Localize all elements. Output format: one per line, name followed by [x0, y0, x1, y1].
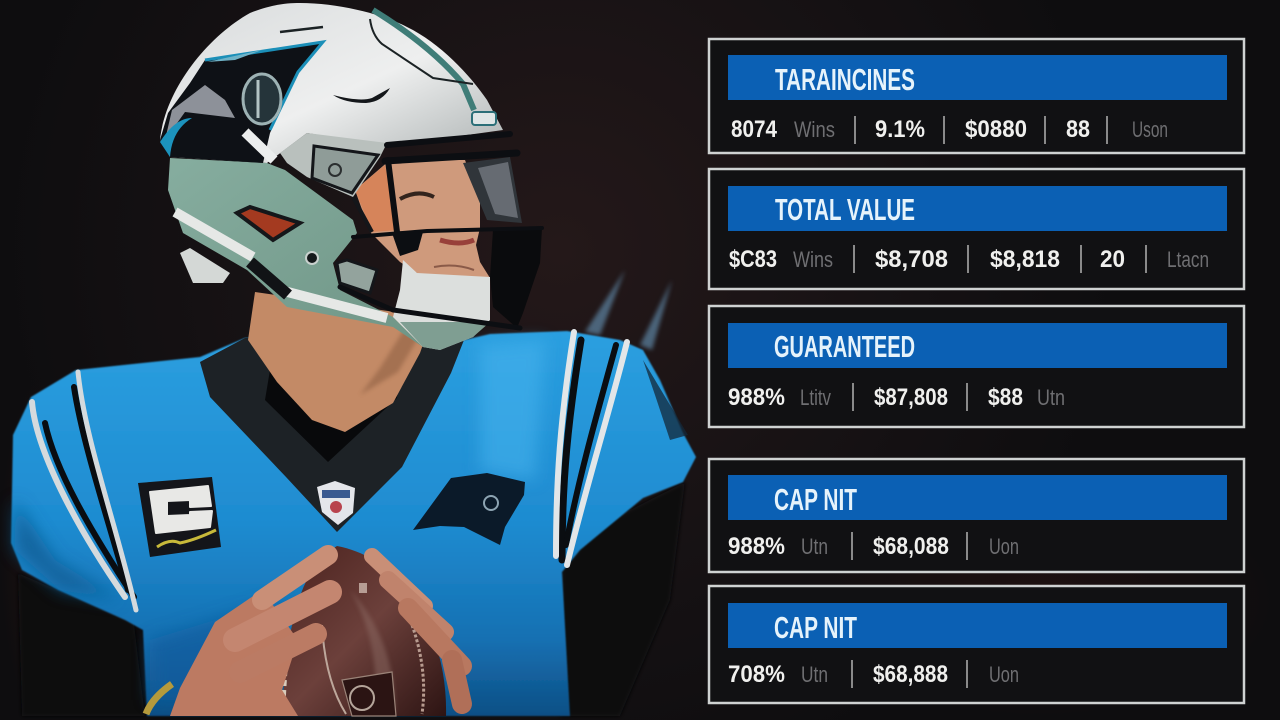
stat row: 8074 [731, 116, 778, 143]
stat row: $8,708 [875, 246, 948, 273]
hands [170, 555, 462, 716]
visor [463, 157, 522, 223]
neck [248, 292, 428, 432]
jersey shading [15, 340, 545, 700]
lower mask [490, 228, 542, 328]
face [355, 160, 490, 278]
heading bar: TOTAL VALUE [775, 192, 915, 227]
heading bar: CAP NIT [774, 610, 857, 645]
stat row [728, 383, 1065, 411]
heading bar: CAP NIT [774, 482, 857, 517]
stat row: $88 [988, 384, 1023, 411]
stat row: $C83 [729, 246, 777, 273]
side panel [168, 158, 423, 347]
stat row: Uson [1132, 117, 1168, 142]
swoosh [333, 88, 390, 103]
decal highlights [160, 42, 323, 157]
vent [237, 207, 300, 240]
league shield [317, 481, 355, 525]
collar [200, 338, 464, 532]
dark sleeves [18, 482, 685, 716]
stat row: $68,088 [873, 533, 949, 560]
stat row: Ltacn [1167, 247, 1209, 272]
heading bar [728, 55, 1227, 100]
jersey [11, 331, 696, 716]
stat row [728, 532, 1019, 560]
stat row: $0880 [965, 116, 1027, 143]
football [282, 546, 446, 716]
upper temple guard [280, 133, 387, 232]
helmet stripe [280, 10, 474, 110]
jersey stripes [32, 332, 627, 610]
heading bar [728, 323, 1227, 368]
stat row: 988% [728, 533, 785, 560]
decal eye [243, 74, 281, 124]
panel: guaranteed [709, 306, 1244, 427]
sleeve emblem [643, 360, 688, 440]
visor glare [478, 162, 518, 218]
stat row: Utn [801, 662, 828, 687]
stat row [731, 116, 1168, 144]
stat row: 20 [1100, 246, 1125, 273]
helmet shell [160, 3, 503, 163]
stat row: Utn [801, 534, 828, 559]
heading bar [728, 603, 1227, 648]
heading bar [728, 475, 1227, 520]
panel: cap hit two [709, 586, 1244, 703]
stat row: 88 [1066, 116, 1090, 143]
jaw pad [337, 260, 377, 293]
stat row: $68,888 [873, 661, 948, 688]
panel: top contract row [709, 39, 1244, 153]
stat row: Ltitv [800, 385, 831, 410]
stat row: $87,808 [874, 384, 948, 411]
stat row: Wins [793, 247, 833, 272]
stat row: Uon [989, 662, 1019, 687]
stat row: $8,818 [990, 246, 1060, 273]
panel: total value [709, 169, 1244, 289]
stat row: 988% [728, 384, 785, 411]
neck shadow [360, 328, 420, 395]
stat row: Uon [989, 534, 1019, 559]
rivet [306, 252, 318, 264]
chin guard [393, 260, 490, 350]
panther decal [160, 42, 323, 163]
logo tag [472, 112, 496, 125]
chin guard lower [400, 322, 490, 350]
stat row [728, 660, 1019, 688]
player illustration [11, 3, 696, 716]
chin strap dark [250, 262, 288, 295]
helmet [160, 3, 542, 350]
eye and mouth [400, 193, 474, 270]
undershirt [265, 370, 400, 462]
facemask bars [340, 134, 542, 328]
white strap [245, 132, 274, 160]
panther logo [413, 473, 525, 545]
stat row: Utn [1037, 385, 1065, 410]
stat row: Wins [794, 117, 835, 142]
captain patch [138, 477, 221, 557]
heading bar [728, 186, 1227, 231]
heading bar: GUARANTEED [774, 329, 915, 364]
panel: cap hit one [709, 459, 1244, 572]
white trim [175, 212, 253, 257]
stat row: 708% [728, 661, 785, 688]
stat row [729, 245, 1209, 273]
stat row: 9.1% [875, 116, 925, 143]
heading bar: TARAINCINES [775, 62, 915, 97]
bracelet [146, 684, 172, 714]
cheek shade [355, 165, 398, 232]
